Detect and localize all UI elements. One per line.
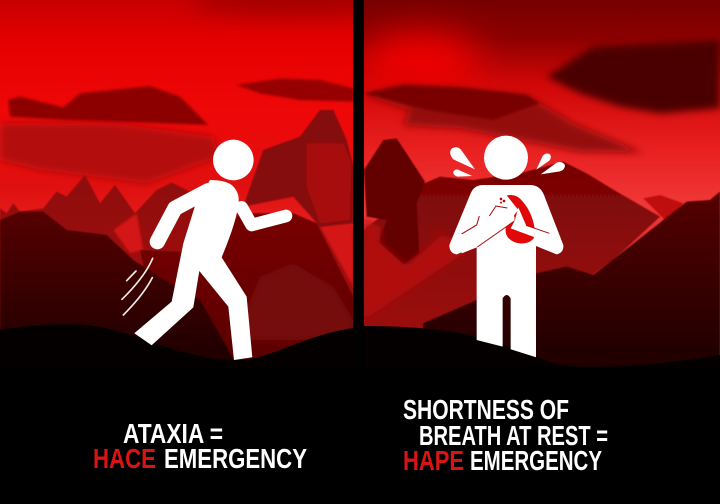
pale snowfield bbox=[113, 213, 143, 253]
left forearm bbox=[462, 207, 515, 253]
dark front hill bbox=[0, 212, 240, 370]
right forearm bbox=[511, 207, 557, 254]
text: HACE label: HACE bbox=[93, 443, 156, 474]
text: emergency: EMERGENCY bbox=[164, 443, 307, 474]
black lower band bbox=[0, 368, 720, 504]
dark top right sky corner bbox=[190, 0, 390, 14]
body silhouette bbox=[449, 185, 563, 357]
text: shortness of breath caption bbox=[403, 394, 608, 476]
rear mountains bbox=[0, 175, 353, 330]
band cloud bbox=[364, 85, 643, 153]
text: ataxia caption bbox=[93, 418, 307, 474]
heart bbox=[506, 195, 535, 243]
middle mountain bbox=[140, 213, 353, 370]
arm outlines bbox=[462, 206, 549, 247]
far mountains bbox=[643, 195, 683, 222]
broad cloud band bbox=[0, 123, 220, 183]
panel: HAPE scene background bbox=[360, 0, 720, 375]
left crag bbox=[364, 138, 425, 265]
breath drops bbox=[450, 147, 565, 177]
dots near heart bbox=[500, 198, 505, 204]
black ground hill right bbox=[364, 326, 720, 504]
text: emergency: EMERGENCY bbox=[470, 445, 602, 476]
large peak bbox=[243, 110, 353, 227]
text: shortness of breath caption: SHORTNESS OF bbox=[403, 394, 569, 425]
motion lines bbox=[122, 258, 153, 315]
panel: HACE scene background bbox=[0, 0, 353, 360]
icon: figure clutching chest bbox=[449, 136, 565, 357]
text: ataxia caption: ATAXIA = bbox=[123, 418, 223, 449]
bright glow at left bbox=[360, 32, 480, 92]
main mountain mass bbox=[360, 162, 660, 333]
icon: staggering figure bbox=[122, 140, 286, 360]
sky patch behind right ridge bbox=[320, 220, 353, 287]
text: shortness of breath caption: BREATH AT REST = bbox=[419, 420, 608, 451]
dark right ridge bbox=[423, 192, 720, 375]
lit lower-left slope bbox=[364, 220, 473, 320]
black ground hill bbox=[0, 324, 353, 504]
large dark cloud bbox=[547, 40, 720, 113]
dark cloud right bbox=[237, 78, 353, 102]
dark cloud bbox=[8, 86, 208, 125]
central divider bbox=[353, 0, 364, 330]
text: HAPE label: HAPE bbox=[403, 445, 464, 476]
